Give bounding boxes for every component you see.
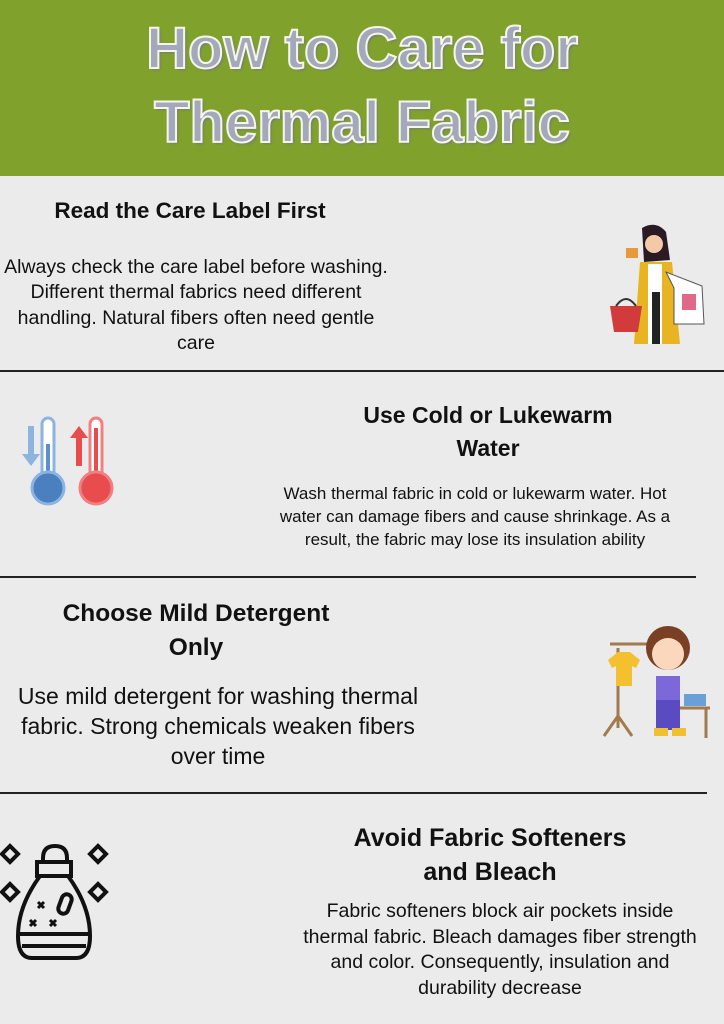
icon: detergent bottle with sparkles [0, 843, 109, 960]
icon: woman reading label [610, 224, 704, 344]
section 3 text: Use mild detergent for washing thermal fabric. Strong chemicals weaken fibers over time [18, 683, 418, 769]
icon: girl with clothes rack [602, 626, 710, 738]
section 3 heading: Only [169, 634, 223, 661]
section 4 heading [354, 824, 626, 886]
title: Thermal Fabric [154, 90, 570, 155]
section 2 heading: Water [456, 435, 520, 461]
section 2 text: Wash thermal fabric in cold or lukewarm water. Hot water can damage fibers and cause shrinkage. As a result, the fabric may lose its insulation ability [280, 484, 670, 549]
section 3 heading [63, 600, 330, 661]
section 4 text: Fabric softeners block air pockets inside thermal fabric. Bleach damages fiber strength and color. Consequently, insulation and durability decrease [303, 900, 697, 998]
title: How to Care for [146, 16, 578, 81]
title banner [0, 0, 724, 176]
icon: thermometers [22, 416, 114, 506]
section 2 heading [363, 402, 613, 461]
section 1 heading: Read the Care Label First [54, 198, 326, 223]
section 2 heading: Use Cold or Lukewarm [363, 402, 613, 428]
title [146, 16, 580, 155]
section 3 heading: Choose Mild Detergent [63, 600, 329, 627]
section 1 text: Always check the care label before washing. Different thermal fabrics need different handling. Natural fibers often need gentle care [4, 256, 388, 354]
section 4 heading: and Bleach [423, 858, 557, 886]
section 4 heading: Avoid Fabric Softeners [354, 824, 626, 852]
